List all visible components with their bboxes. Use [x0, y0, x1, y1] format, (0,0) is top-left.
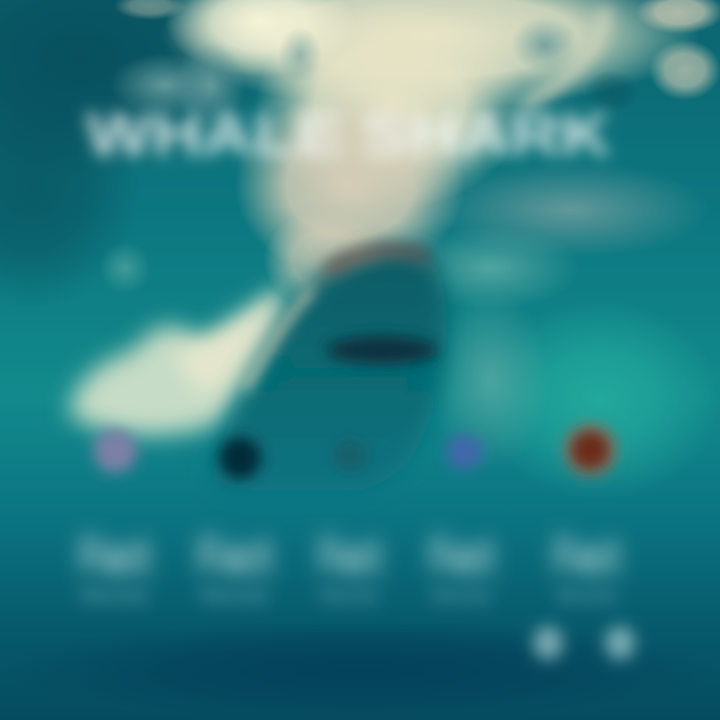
mark: right — [605, 626, 635, 660]
column 2 — [198, 437, 272, 608]
column 1 caption: Note — [80, 583, 150, 608]
icon: purple circle — [93, 429, 137, 473]
column 4 caption: Note — [431, 583, 493, 608]
background: pale cloud left of the shark — [70, 242, 285, 435]
small marks lower right — [533, 626, 635, 660]
column 4 — [430, 434, 494, 608]
background: sunlight through the surface — [110, 0, 720, 310]
column 1 — [80, 429, 150, 608]
column 2 heading: Fact — [198, 527, 272, 585]
icon: dark circle — [219, 437, 261, 479]
column 1 heading: Fact — [80, 527, 150, 585]
shark: mouth — [326, 336, 438, 364]
illustration: shark — [210, 250, 446, 490]
icon: blue circle — [446, 434, 482, 470]
icon: teal circle — [333, 438, 367, 472]
column 2 caption: Note — [200, 583, 270, 608]
icon: rust circle — [563, 423, 617, 477]
shark: back highlight — [245, 290, 312, 390]
column 5 caption: Note — [556, 583, 618, 608]
column 5 heading: Fact — [554, 527, 620, 585]
column 3 — [319, 438, 381, 608]
shark: head ridge — [325, 250, 430, 272]
column 4 heading: Fact — [430, 527, 494, 585]
title: WHALE SHARK — [86, 101, 611, 168]
column 5 — [554, 423, 620, 608]
column 3 caption: Note — [320, 583, 380, 608]
mark: left — [533, 626, 563, 660]
column 3 heading: Fact — [319, 527, 381, 585]
